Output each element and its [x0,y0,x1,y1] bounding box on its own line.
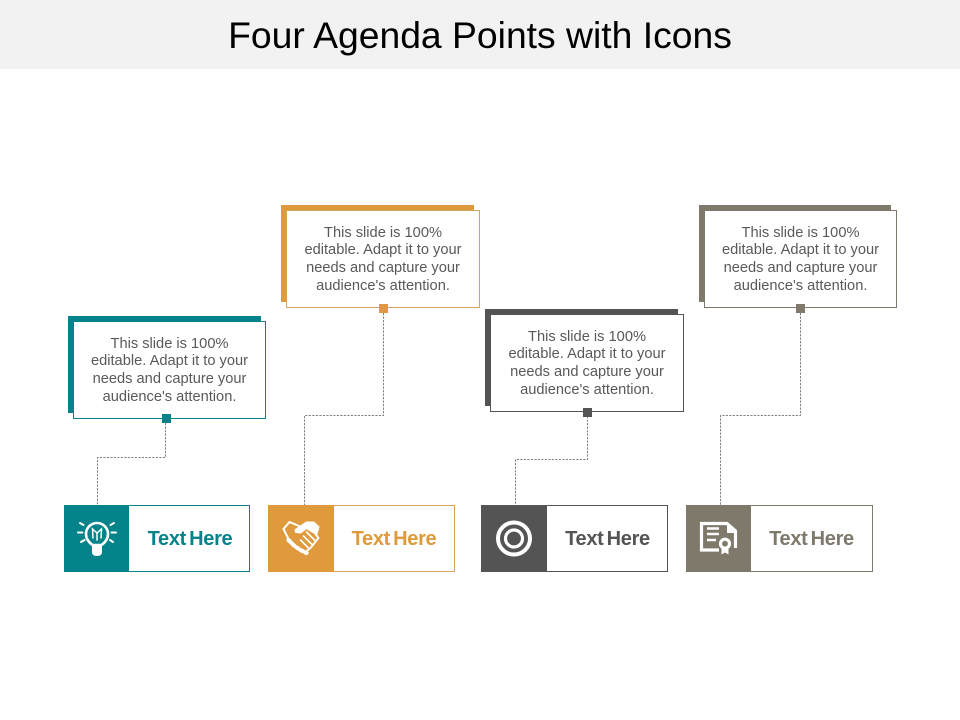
panel: callout 2 [281,205,480,308]
panel: callout 3: audience's attention. [520,382,654,398]
panel: item 2 [268,505,455,572]
panel: callout 1: needs and capture your [93,371,246,387]
panel: callout 1: editable. Adapt it to your [91,353,248,369]
panel: callout 4: audience's attention. [734,278,867,294]
panel: callout 4 [699,205,897,308]
panel: callout 4: This slide is 100% [742,224,860,240]
panel: callout 3: editable. Adapt it to your [508,346,666,362]
panel: callout 3: needs and capture your [510,364,664,380]
icon: certificate [700,522,738,554]
marker: callout 1 [162,414,171,423]
panel: callout 1 [68,316,266,419]
panel: item 1 [64,505,250,572]
icon: light bulb [77,522,117,556]
panel: callout 4: editable. Adapt it to your [722,242,879,258]
panel: callout 2: needs and capture your [306,260,460,276]
marker: callout 2 [379,304,388,313]
panel: callout 3: This slide is 100% [528,328,646,344]
panel: item 3 [481,505,668,572]
header band [0,0,960,69]
label: item 4: Text Here [769,528,854,550]
label: item 3: Text Here [565,528,650,550]
title: Four Agenda Points with Icons [228,14,732,56]
marker: callout 4 [796,304,805,313]
marker: callout 3 [583,408,592,417]
icon: handshake [282,521,320,556]
panel: callout 2: This slide is 100% [324,224,442,240]
panel: callout 2: editable. Adapt it to your [304,242,462,258]
panel: callout 1: audience's attention. [103,389,236,405]
panel: callout 3 [485,309,684,412]
panel: callout 4: needs and capture your [724,260,877,276]
label: item 2: Text Here [352,528,436,550]
panel: callout 1: This slide is 100% [110,336,228,352]
panel: callout 2: audience's attention. [316,278,450,294]
icon: target [496,520,532,556]
panel: item 4 [686,505,873,572]
label: item 1: Text Here [148,528,232,550]
